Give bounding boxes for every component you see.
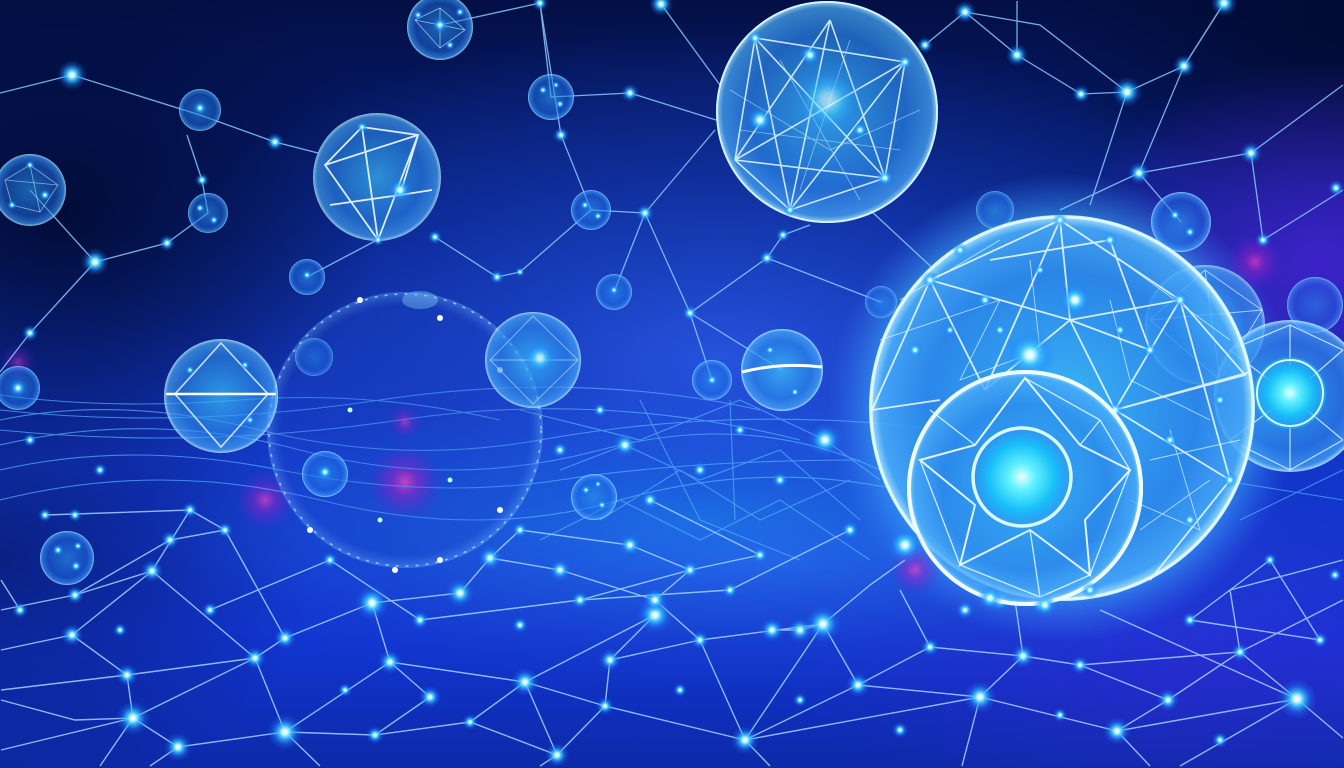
upper network lines [0, 1, 1343, 380]
sphere: top centre wireframe [716, 1, 938, 223]
bright highlight sparkles [887, 527, 1099, 617]
sphere: top small [407, 0, 473, 60]
sphere: right back cluster [1145, 265, 1343, 385]
sphere: far right with core [1214, 320, 1344, 472]
sphere: centre equator [741, 329, 823, 411]
haze of lines in the middle band [0, 387, 1343, 560]
lower network nodes [12, 403, 1342, 767]
sphere: upper left wireframe [313, 113, 441, 246]
sphere: front wireframe with bright core [907, 370, 1143, 606]
small spheres upper left [0, 74, 1211, 585]
magenta glows [0, 234, 1283, 596]
upper network nodes [22, 0, 1344, 341]
sphere: large right wireframe [869, 212, 1255, 601]
sphere: large clear bubble [267, 291, 543, 573]
lower network mesh lines [1, 500, 1343, 766]
sphere: bubble right companion [485, 312, 581, 408]
sphere: left equator [164, 339, 278, 453]
